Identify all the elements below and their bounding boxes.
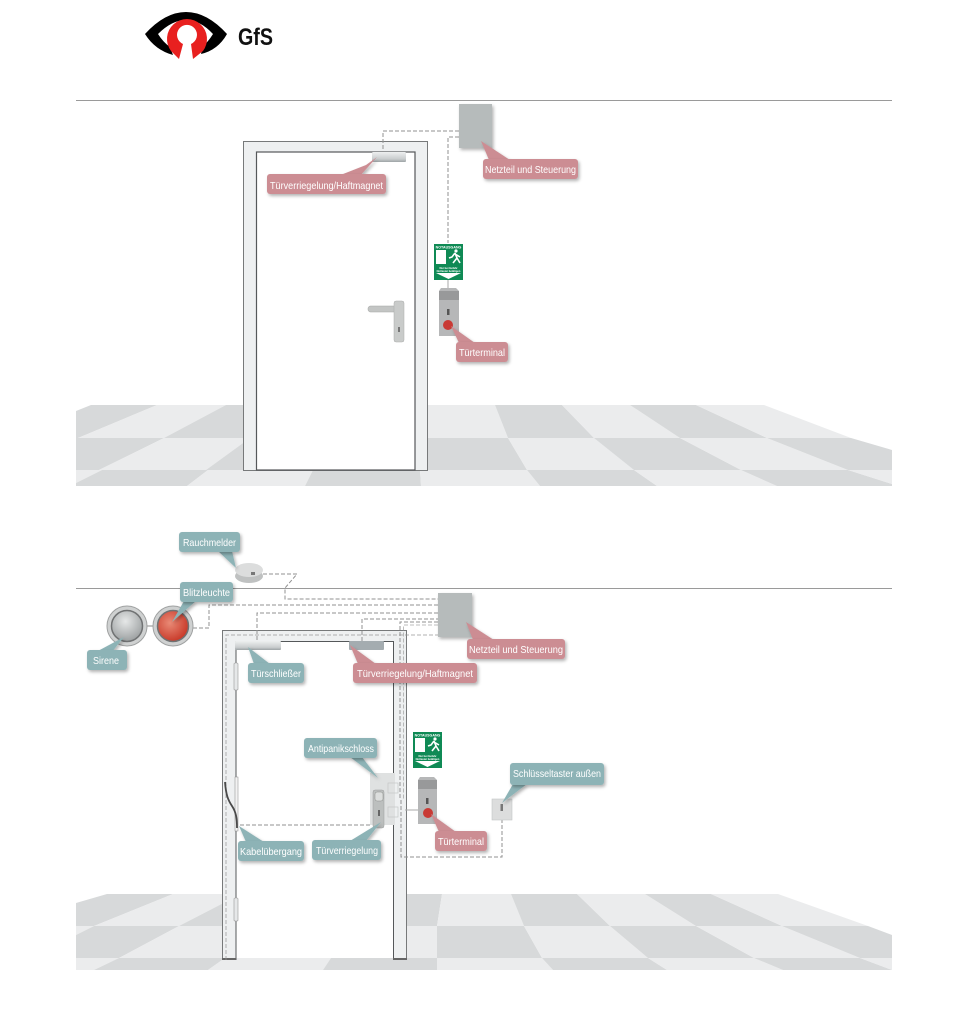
control box: top scene (459, 104, 492, 148)
emergency exit sign: top scene (434, 244, 463, 280)
siren (107, 606, 147, 646)
label: Blitzleuchte: Blitzleuchte (183, 587, 230, 599)
door terminal: top scene (439, 288, 459, 336)
emergency exit sign: top scene: NOTAUSGANG (436, 246, 462, 250)
label: Blitzleuchte (172, 582, 233, 622)
wiring: bottom scene (147, 574, 502, 960)
label: Türverriegelung/Haftmagnet bottom: Türverriegelung/Haftmagnet (357, 668, 473, 680)
panic lock (370, 773, 398, 828)
label: Antipanikschloss (304, 738, 378, 778)
logo: GfS: GfS (238, 24, 273, 51)
emergency exit sign: top scene: Nottaster betätigen (437, 269, 461, 273)
divider line top (76, 100, 892, 101)
floor: bottom scene (76, 894, 892, 970)
label: Netzteil und Steuerung bottom: Netzteil und Steuerung (469, 644, 563, 656)
emergency exit sign: bottom scene: NOTAUSGANG (415, 734, 441, 738)
label: Türterminal top (451, 326, 508, 362)
door magnet: top scene (372, 152, 406, 162)
label: Netzteil und Steuerung bottom (466, 622, 565, 659)
label: Sirene (87, 637, 127, 670)
floor: top scene (76, 405, 892, 486)
label: Türverriegelung: Türverriegelung (316, 845, 378, 857)
label: Türterminal bottom (431, 814, 487, 851)
label: Kabelübergang (238, 826, 304, 861)
label: Türterminal bottom: Türterminal (438, 836, 484, 848)
label: Türverriegelung/Haftmagnet bottom (350, 645, 477, 683)
door handle (368, 301, 404, 342)
emergency exit sign: top scene: Nur bei Gefahr (439, 266, 458, 270)
emergency exit sign: bottom scene: Nottaster betätigen (416, 757, 440, 761)
door terminal: bottom scene (418, 777, 437, 824)
door frame: bottom scene (222, 630, 407, 960)
emergency exit sign: bottom scene (413, 732, 442, 768)
door magnet: bottom scene (349, 641, 384, 650)
smoke detector (235, 563, 263, 583)
label: Türverriegelung/Haftmagnet: Türverriegelung/Haftmagnet (270, 180, 383, 192)
label: Türschließer (248, 647, 304, 683)
control box: bottom scene (438, 593, 472, 637)
emergency exit sign: bottom scene: Nur bei Gefahr (418, 754, 437, 758)
wiring: top scene (383, 131, 459, 288)
flash light (153, 606, 193, 646)
label: Netzteil und Steuerung (481, 141, 578, 179)
label: Kabelübergang: Kabelübergang (240, 846, 302, 858)
cable transfer (225, 777, 238, 831)
label: Schlüsseltaster außen: Schlüsseltaster außen (513, 768, 601, 780)
label: Türterminal top: Türterminal (459, 347, 505, 359)
label: Antipanikschloss: Antipanikschloss (308, 743, 374, 755)
label: Türverriegelung/Haftmagnet (267, 157, 386, 194)
label: Rauchmelder (179, 532, 240, 568)
label: Sirene: Sirene (93, 655, 119, 667)
label: Türschließer: Türschließer (251, 668, 301, 680)
divider line bottom (76, 588, 892, 589)
logo: GfS (145, 12, 273, 59)
key switch (492, 799, 512, 820)
label: Netzteil und Steuerung: Netzteil und Steuerung (485, 164, 576, 176)
label: Rauchmelder: Rauchmelder (183, 537, 236, 549)
door closer (235, 641, 281, 650)
door frame: top scene (244, 142, 428, 470)
label: Schlüsseltaster außen (502, 763, 604, 803)
label: Türverriegelung (312, 822, 381, 860)
